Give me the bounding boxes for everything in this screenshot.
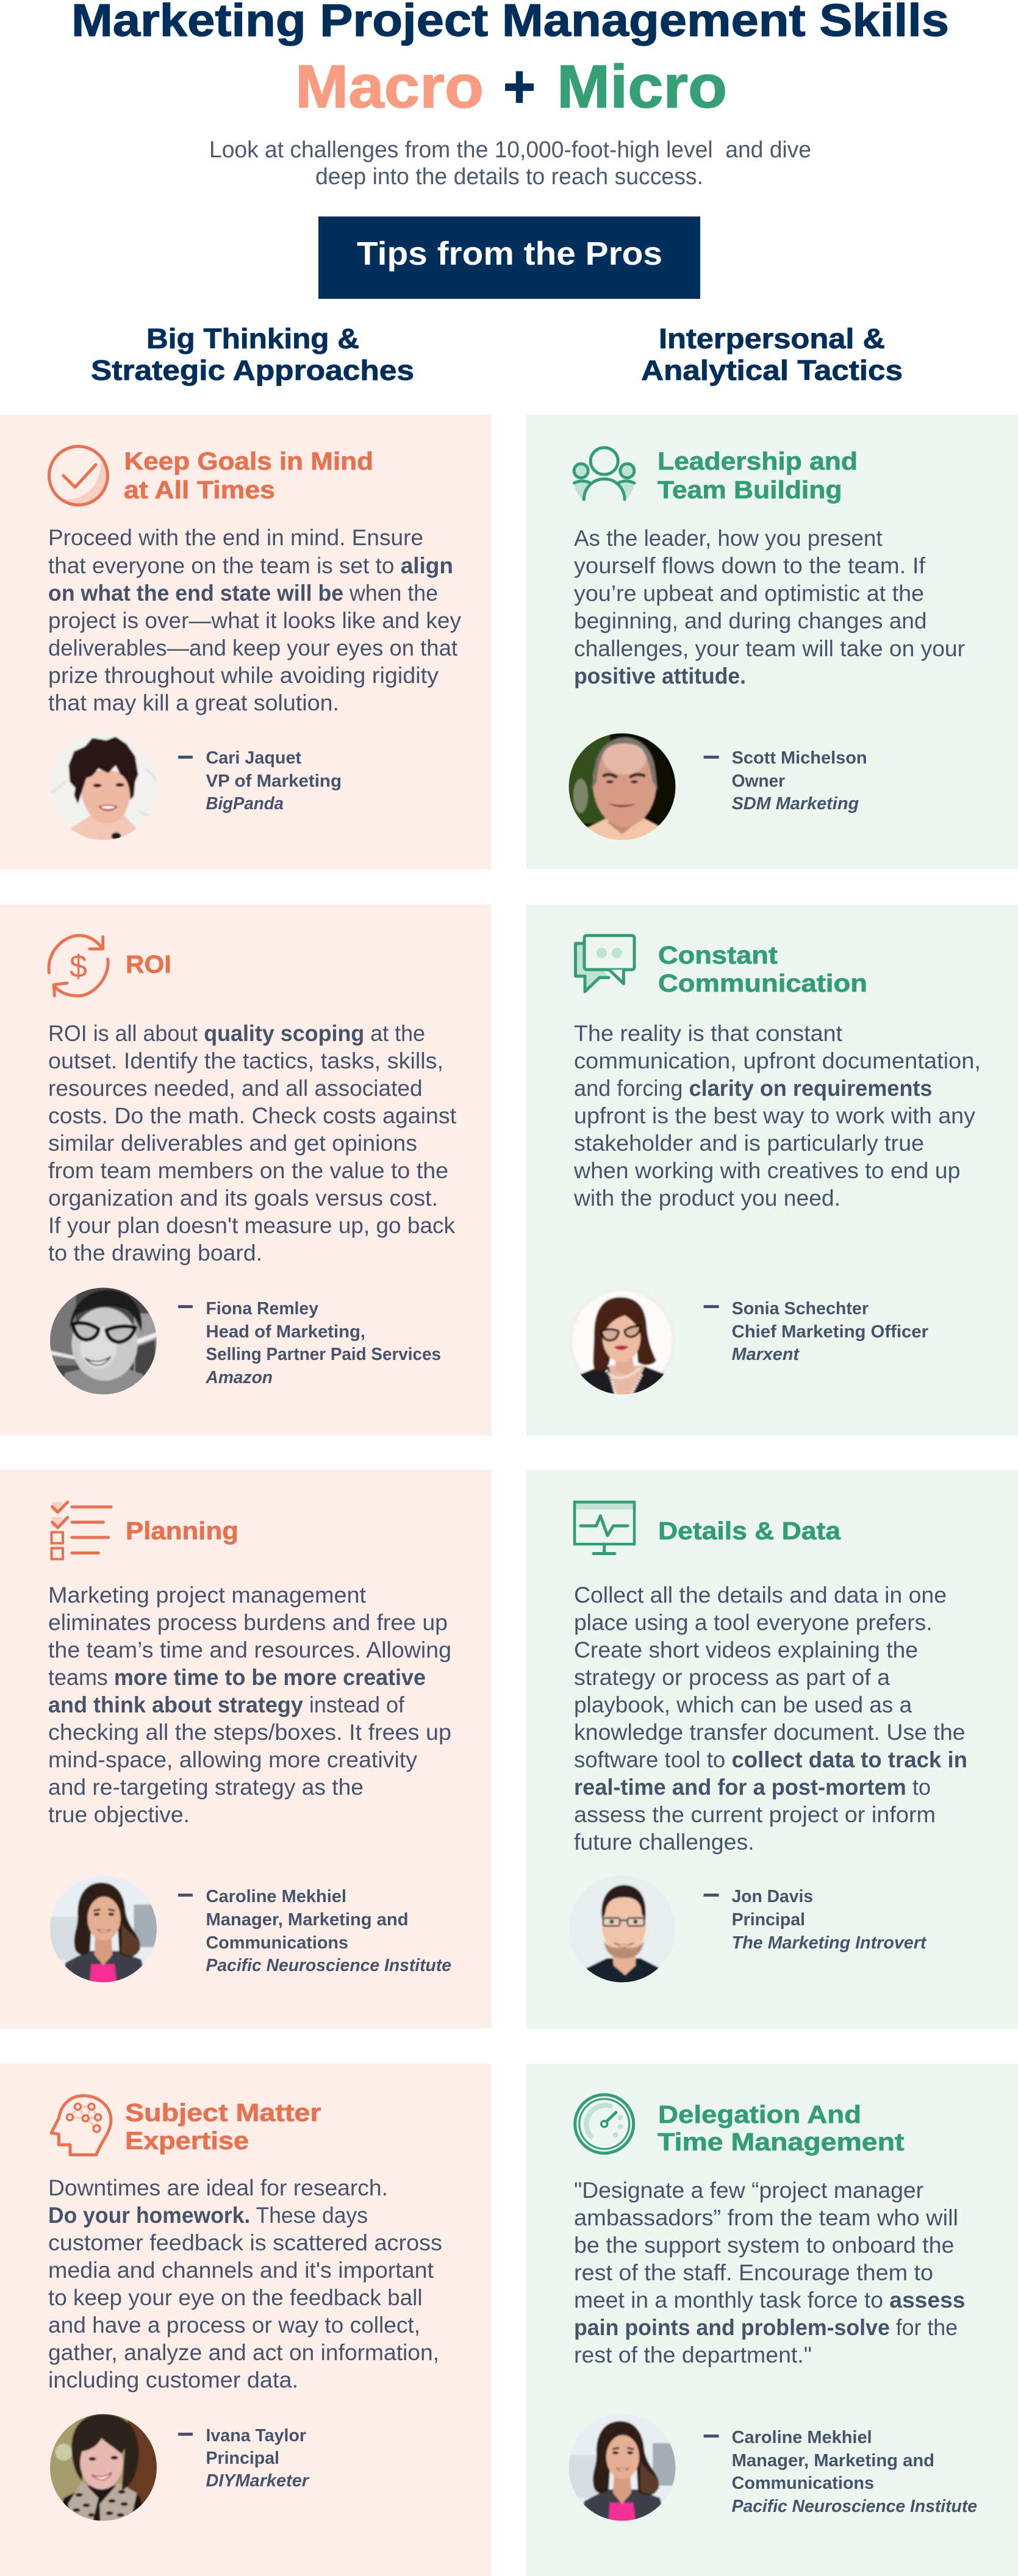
body text: playbook, which can be used as a: [574, 1692, 912, 1717]
panel: leadership and team building: [526, 415, 1018, 870]
body text: true objective.: [48, 1802, 190, 1827]
heading: Macro + Micro: +: [503, 52, 536, 120]
body text: "Designate a few “project manager: [574, 2178, 923, 2203]
heading: [658, 941, 867, 997]
attribution: Pacific Neuroscience Institute: [732, 2497, 977, 2516]
attribution: [178, 748, 342, 814]
attribution: [178, 1887, 451, 1975]
heading: Constant: [658, 941, 778, 969]
body text: software tool to collect data to track in: [574, 1747, 967, 1772]
attribution: Cari Jaquet: [206, 748, 301, 768]
body text: [574, 2178, 965, 2367]
body text: As the leader, how you present: [574, 526, 883, 551]
photo: Ivana Taylor: [49, 2413, 159, 2522]
body text: you’re upbeat and optimistic at the: [574, 581, 924, 606]
column heading: interpersonal: [641, 323, 903, 386]
attribution: [704, 748, 867, 814]
body text: meet in a monthly task force to assess: [574, 2288, 965, 2313]
body text: [48, 1021, 457, 1265]
body text: resources needed, and all associated: [48, 1076, 423, 1101]
body text: Collect all the details and data in one: [574, 1583, 947, 1608]
body text: Do your homework. These days: [48, 2203, 368, 2228]
attribution: [178, 2426, 310, 2491]
photo: Cari Jaquet: [49, 732, 159, 843]
subtitle: [209, 137, 811, 190]
heading: Details & Data: [658, 1517, 841, 1545]
body text: real-time and for a post-mortem to: [574, 1775, 931, 1800]
photo: Caroline Mekhiel: [567, 2413, 677, 2522]
body text: Marketing project management: [48, 1583, 367, 1608]
attribution: Selling Partner Paid Services: [206, 1345, 441, 1364]
icon: monitor: [575, 1502, 634, 1554]
body text: eliminates process burdens and free up: [48, 1610, 448, 1635]
attribution: Scott Michelson: [732, 748, 867, 768]
attribution: VP of Marketing: [206, 771, 342, 791]
body text: If your plan doesn't measure up, go back: [48, 1213, 455, 1238]
attribution: Caroline Mekhiel: [732, 2428, 872, 2447]
body text: costs. Do the math. Check costs against: [48, 1103, 457, 1128]
body text: Create short videos explaining the: [574, 1637, 918, 1662]
heading: Subject Matter: [125, 2098, 321, 2127]
body text: and forcing clarity on requirements: [574, 1076, 932, 1101]
attribution: Pacific Neuroscience Institute: [206, 1956, 451, 1975]
body text: upfront is the best way to work with any: [574, 1103, 976, 1128]
attribution: Chief Marketing Officer: [732, 1322, 928, 1342]
column heading: interpersonal: Interpersonal &: [659, 323, 885, 354]
body text: teams more time to be more creative: [48, 1665, 426, 1690]
body text: and re-targeting strategy as the: [48, 1775, 364, 1800]
heading: at All Times: [124, 476, 275, 504]
panel: delegation and time management: [526, 2064, 1018, 2576]
heading: [658, 2100, 905, 2156]
body text: challenges, your team will take on your: [574, 636, 965, 661]
column heading: big thinking: Strategic Approaches: [91, 354, 414, 386]
body text: Downtimes are ideal for research.: [48, 2175, 388, 2200]
heading: Keep Goals in Mind: [124, 447, 373, 475]
photo: Sonia Schechter: [572, 1290, 672, 1394]
heading: Macro + Micro: Micro: [557, 52, 727, 120]
heading: [125, 2098, 321, 2155]
heading: ROI: [126, 950, 171, 978]
banner: Tips from the Pros: Tips from the Pros: [357, 235, 662, 272]
body text: that may kill a great solution.: [48, 690, 339, 715]
icon: team: [574, 448, 634, 500]
body text: [48, 1583, 451, 1827]
panel: subject matter expertise: [0, 2064, 492, 2576]
heading: Team Building: [658, 476, 842, 504]
attribution: BigPanda: [206, 794, 284, 814]
body text: communication, upfront documentation,: [574, 1048, 981, 1073]
body text: be the support system to onboard the: [574, 2233, 954, 2258]
body text: The reality is that constant: [574, 1021, 843, 1046]
body text: [573, 1021, 981, 1211]
body text: ROI is all about quality scoping at the: [48, 1021, 425, 1046]
attribution: Owner: [732, 771, 785, 791]
body text: [574, 526, 965, 689]
heading: Expertise: [125, 2127, 249, 2155]
attribution: Jon Davis: [732, 1887, 813, 1906]
photo: Jon Davis: [567, 1874, 677, 1984]
body text: knowledge transfer document. Use the: [574, 1720, 965, 1745]
attribution: Amazon: [206, 1368, 273, 1387]
body text: rest of the staff. Encourage them to: [574, 2260, 933, 2285]
icon: dollar cycle: $: [70, 949, 87, 984]
heading: Macro + Micro: [295, 52, 727, 120]
column heading: big thinking: Big Thinking &: [146, 323, 359, 354]
body text: prize throughout while avoiding rigidity: [48, 663, 439, 688]
body text: stakeholder and is particularly true: [574, 1131, 924, 1156]
body text: positive attitude.: [574, 664, 746, 689]
heading: Planning: [126, 1517, 238, 1545]
heading: Time Management: [658, 2128, 905, 2156]
body text: [48, 2175, 442, 2392]
panel: keep goals in mind: [0, 415, 492, 870]
attribution: [704, 2428, 977, 2516]
body text: mind-space, allowing more creativity: [48, 1747, 417, 1772]
icon: chat bubbles: [576, 936, 634, 992]
body text: project is over—what it looks like and key: [48, 608, 461, 633]
body text: organization and its goals versus cost.: [48, 1186, 438, 1211]
photo: Scott Michelson: [567, 732, 677, 842]
photo: Fiona Remley: [49, 1286, 159, 1396]
attribution: [704, 1299, 928, 1364]
body text: deliverables—and keep your eyes on that: [48, 635, 458, 660]
attribution: Fiona Remley: [206, 1299, 318, 1318]
attribution: Principal: [732, 1910, 805, 1930]
attribution: Marxent: [732, 1345, 800, 1364]
body text: on what the end state will be when the: [48, 581, 438, 606]
body text: assess the current project or inform: [574, 1802, 936, 1827]
attribution: DIYMarketer: [206, 2471, 310, 2491]
attribution: Communications: [206, 1933, 348, 1953]
body text: customer feedback is scattered across: [48, 2230, 442, 2255]
body text: [574, 1583, 967, 1855]
body text: future challenges.: [574, 1830, 755, 1855]
heading: Macro + Micro: Macro: [295, 52, 484, 120]
subtitle: Look at challenges from the 10,000-foot-high level and dive: [209, 137, 811, 163]
photo: Caroline Mekhiel: [49, 1874, 159, 1984]
body text: pain points and problem-solve for the: [574, 2315, 958, 2340]
column heading: interpersonal: Analytical Tactics: [641, 354, 903, 386]
body text: with the product you need.: [573, 1186, 841, 1211]
panel: details and data: [526, 1470, 1018, 2028]
body text: from team members on the value to the: [48, 1158, 448, 1183]
body text: to keep your eye on the feedback ball: [48, 2285, 423, 2310]
body text: strategy or process as part of a: [574, 1665, 890, 1690]
banner: Tips from the Pros: [318, 216, 700, 299]
column heading: big thinking: [91, 323, 414, 386]
heading: [124, 447, 373, 504]
body text: yourself flows down to the team. If: [574, 553, 926, 578]
body text: ambassadors” from the team who will: [574, 2205, 958, 2230]
body text: and think about strategy instead of: [48, 1692, 405, 1717]
heading: [658, 447, 858, 504]
icon: gauge: [575, 2095, 634, 2153]
attribution: The Marketing Introvert: [732, 1933, 927, 1953]
attribution: Principal: [206, 2449, 279, 2468]
icon: checklist: [51, 1502, 111, 1559]
body text: the team’s time and resources. Allowing: [48, 1637, 451, 1662]
body text: media and channels and it's important: [48, 2258, 434, 2283]
body text: gather, analyze and act on information,: [48, 2340, 439, 2365]
attribution: Manager, Marketing and: [206, 1910, 409, 1930]
heading: Leadership and: [658, 447, 858, 475]
panel: planning: [0, 1470, 492, 2028]
icon: dollar cycle: [49, 936, 108, 996]
attribution: Ivana Taylor: [206, 2426, 306, 2445]
subtitle: deep into the details to reach success.: [315, 164, 703, 190]
attribution: Manager, Marketing and: [732, 2451, 934, 2470]
body text: place using a tool everyone prefers.: [574, 1610, 932, 1635]
body text: to the drawing board.: [48, 1240, 262, 1265]
attribution: Sonia Schechter: [732, 1299, 869, 1318]
attribution: [178, 1299, 441, 1387]
body text: beginning, and during changes and: [574, 609, 927, 633]
heading: Communication: [658, 969, 867, 997]
body text: checking all the steps/boxes. It frees up: [48, 1720, 451, 1745]
body text: and have a process or way to collect,: [48, 2313, 420, 2338]
body text: when working with creatives to end up: [573, 1158, 960, 1183]
body text: rest of the department.": [574, 2342, 812, 2367]
body text: similar deliverables and get opinions: [48, 1131, 417, 1156]
attribution: Caroline Mekhiel: [206, 1887, 346, 1906]
icon: check circle: [49, 446, 108, 505]
attribution: Communications: [732, 2474, 874, 2493]
heading: Delegation And: [658, 2100, 861, 2128]
body text: outset. Identify the tactics, tasks, skills,: [48, 1048, 443, 1073]
attribution: SDM Marketing: [732, 794, 859, 814]
body text: that everyone on the team is set to align: [48, 553, 453, 578]
icon: head with network: [51, 2095, 111, 2155]
attribution: Head of Marketing,: [206, 1322, 365, 1342]
panel: ROI: [0, 904, 492, 1436]
body text: including customer data.: [48, 2367, 298, 2392]
attribution: [704, 1887, 927, 1953]
panel: constant communication: [526, 904, 1018, 1436]
body text: [48, 525, 461, 715]
body text: Proceed with the end in mind. Ensure: [48, 525, 423, 550]
